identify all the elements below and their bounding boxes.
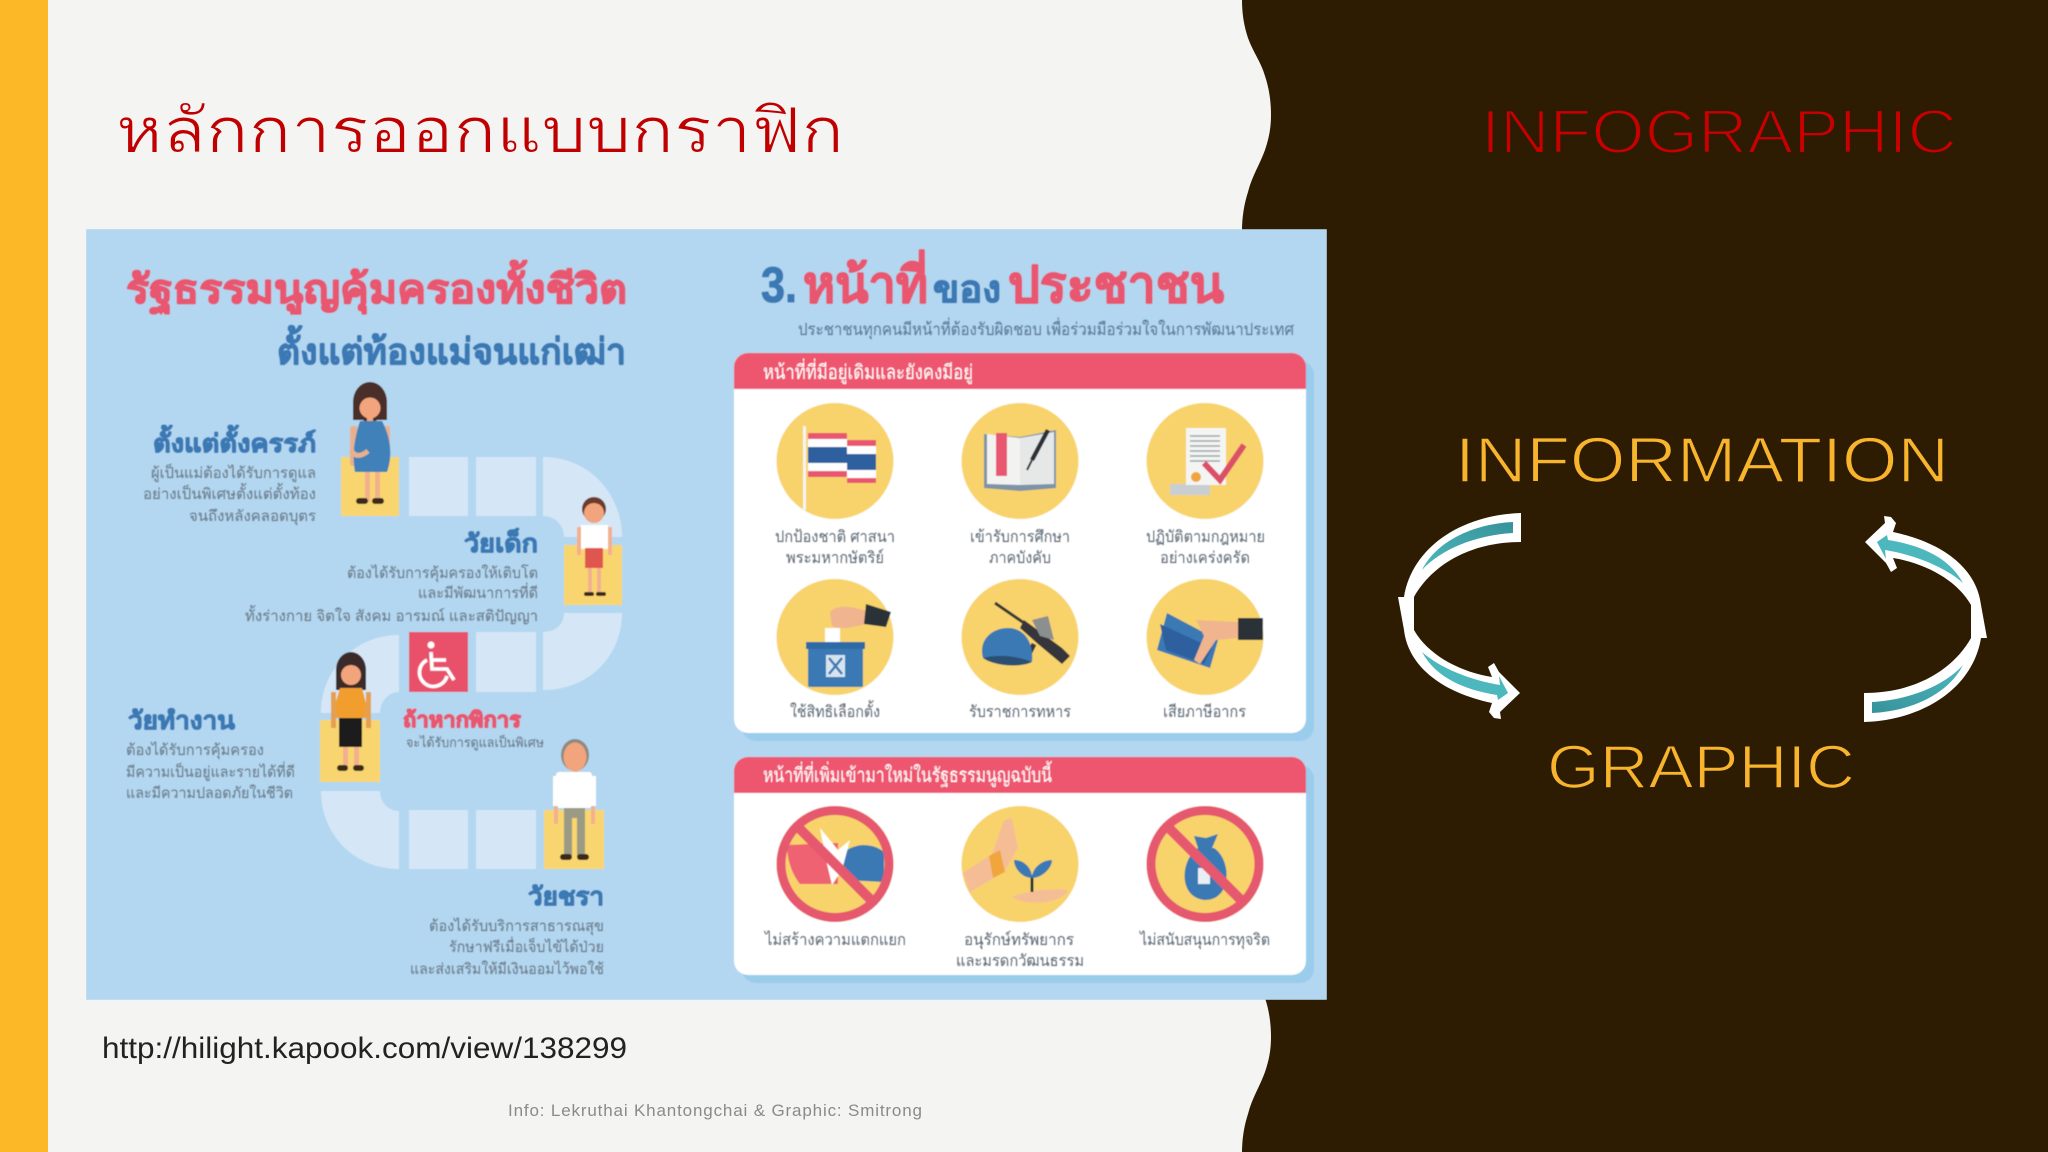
figure: child (577, 497, 612, 596)
labels: รับราชการทหาร (969, 704, 1071, 721)
heading: 3. duties of citizens: 3. (761, 257, 797, 313)
heading: constitution protects whole life: ตั้งแต่ท้องแม่จนแก่เฒ่า (277, 325, 626, 372)
text block: old age (410, 883, 604, 978)
text block: childhood: ทั้งร่างกาย จิตใจ สังคม อารมณ์ และสติปัญญา (245, 605, 538, 625)
panel: existing duties (734, 353, 1314, 741)
icon: law document with check (1170, 428, 1244, 495)
heading: constitution protects whole life (126, 260, 627, 372)
text block: childhood: และมีพัฒนาการที่ดี (418, 582, 538, 602)
text block: old age: วัยชรา (528, 883, 604, 911)
text block: working age: ต้องได้รับการคุ้มครอง (126, 741, 264, 760)
labels: อนุรักษ์ทรัพยากร (964, 930, 1074, 950)
icon: book and pen (984, 430, 1056, 491)
label: INFORMATION: INFORMATION (1455, 424, 1949, 496)
text block: from pregnancy (143, 424, 316, 526)
labels: พระมหากษัตริย์ (786, 548, 884, 567)
infographic image panel (86, 229, 1327, 1000)
heading: 3. duties of citizens: ของ (933, 269, 1001, 311)
panel: new duties (734, 757, 1314, 983)
labels: ไม่สนับสนุนการทุจริต (1138, 930, 1270, 950)
figure: elderly man (553, 739, 596, 860)
text block: from pregnancy: อย่างเป็นพิเศษตั้งแต่ตั้งท้อง (143, 483, 316, 503)
text block: working age: และมีความปลอดภัยในชีวิต (126, 784, 293, 802)
labels: เข้ารับการศึกษา (970, 528, 1070, 546)
text block: from pregnancy: ผู้เป็นแม่ต้องได้รับการดูแล (151, 463, 316, 482)
text block: working age: วัยทำงาน (128, 707, 235, 735)
heading: 3. duties of citizens: ประชาชน (1008, 257, 1224, 313)
text block: disabled: ถ้าหากพิการ (403, 708, 522, 732)
heading: constitution protects whole life: รัฐธรรมนูญคุ้มครองทั้งชีวิต (126, 260, 627, 316)
text block: working age (126, 707, 295, 802)
text block: old age: และส่งเสริมให้มีเงินออมไว้พอใช้ (410, 960, 604, 978)
source URL: http://hilight.kapook.com/view/138299 (102, 1032, 627, 1065)
labels (763, 930, 1270, 970)
heading: 3. duties of citizens (761, 250, 1224, 313)
icon: helmet and rifle (982, 603, 1070, 665)
arrow: information to graphic (1398, 513, 1521, 719)
panel header: หน้าที่ที่มีอยู่เดิมและยังคงมีอยู่ (763, 358, 973, 385)
icon: wheelchair (419, 642, 454, 686)
text block: childhood: วัยเด็ก (464, 528, 538, 558)
credit line: Info: Lekruthai Khantongchai & Graphic: Smitrong (508, 1101, 922, 1120)
labels: ใช้สิทธิเลือกตั้ง (790, 700, 880, 721)
text block: disabled (403, 708, 544, 751)
panel header: หน้าที่ที่เพิ่มเข้ามาใหม่ในรัฐธรรมนูญฉบับนี้ (763, 761, 1052, 788)
labels (775, 528, 1265, 721)
figure: working woman (331, 652, 371, 771)
heading: INFOGRAPHIC: INFOGRAPHIC (1481, 98, 1957, 167)
text block: working age: มีความเป็นอยู่และรายได้ที่ดี (126, 761, 295, 781)
heading: 3. duties of citizens: หน้าที่ (803, 250, 928, 313)
icon: no conflict (776, 806, 894, 922)
icon: ballot box (806, 604, 891, 687)
icon: no corruption (1146, 806, 1264, 922)
arrow: graphic to information (1864, 516, 1987, 722)
dark wavy right panel (1242, 0, 2048, 1152)
labels: และมรดกวัฒนธรรม (956, 953, 1084, 970)
icon: conservation (962, 806, 1078, 922)
text block: childhood: ต้องได้รับการคุ้มครองให้เติบโต (347, 564, 538, 583)
text block: from pregnancy: จนถึงหลังคลอดบุตร (189, 508, 316, 526)
labels: ปกป้องชาติ ศาสนา (775, 528, 895, 546)
icon: banknotes and hand (1157, 613, 1263, 668)
board path squares (320, 457, 622, 869)
label: GRAPHIC: GRAPHIC (1547, 733, 1855, 801)
text block: childhood (245, 528, 538, 625)
left accent bar (0, 0, 48, 1152)
labels: อย่างเคร่งครัด (1160, 550, 1250, 567)
text block: old age: ต้องได้รับบริการสาธารณสุข (429, 917, 604, 936)
labels: ปฏิบัติตามกฎหมาย (1146, 529, 1265, 546)
title: หลักการออกแบบกราฟิก (116, 97, 844, 166)
icon: flag (803, 426, 876, 510)
subheading: ประชาชนทุกคนมีหน้าที่ต้องรับผิดชอบ เพื่อร่วมมือร่วมใจในการพัฒนาประเทศ (798, 317, 1294, 340)
labels: เสียภาษีอากร (1163, 703, 1246, 721)
labels: ภาคบังคับ (989, 550, 1051, 567)
text block: old age: รักษาฟรีเมื่อเจ็บไข้ได้ป่วย (449, 936, 604, 956)
figure: pregnant woman (350, 382, 390, 504)
text block: from pregnancy: ตั้งแต่ตั้งครรภ์ (153, 424, 316, 458)
text block: disabled: จะได้รับการดูแลเป็นพิเศษ (406, 733, 544, 751)
labels: ไม่สร้างความแตกแยก (763, 930, 906, 949)
icon circles (776, 403, 1264, 695)
